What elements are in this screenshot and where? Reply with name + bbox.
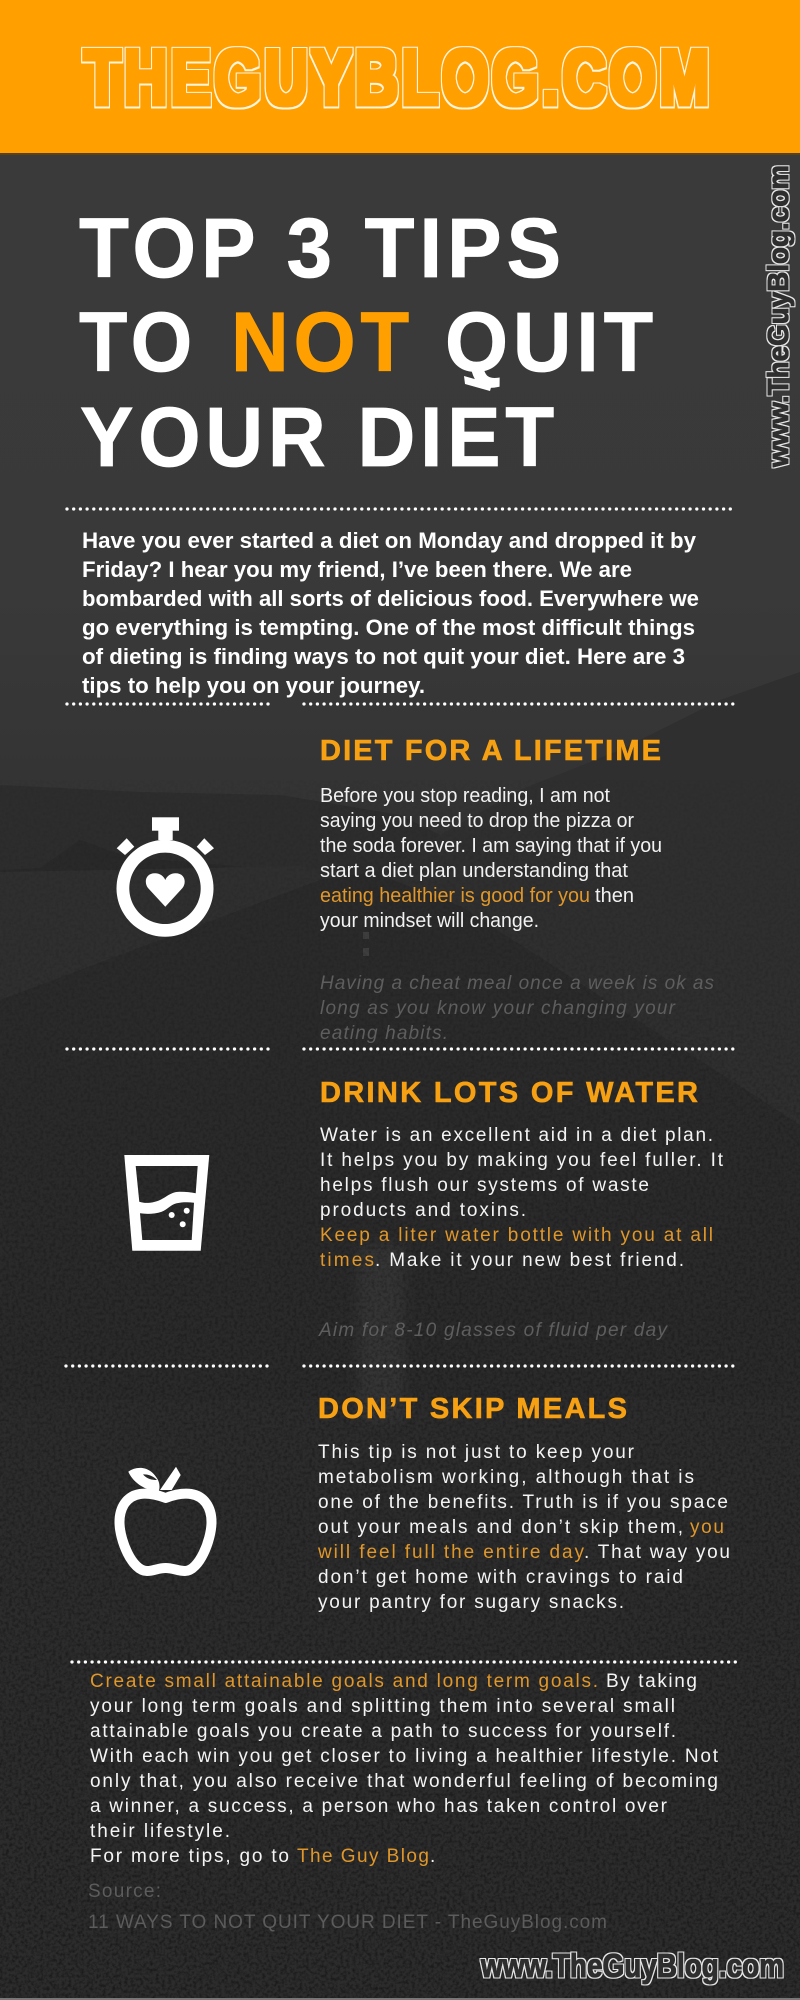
title [79, 201, 658, 484]
title: QUIT [445, 295, 658, 389]
body text: eating healthier is good for you [320, 885, 590, 907]
title: TO [79, 295, 197, 389]
body text: out your meals and don’t skip them, [318, 1517, 683, 1538]
divider closing [72, 1660, 738, 1664]
divider section 1 [67, 702, 733, 706]
closing text: your long term goals and splitting them into several small [90, 1696, 675, 1717]
body text: . Make it your new best friend. [375, 1250, 684, 1271]
body text: . That way you [584, 1542, 730, 1563]
italic note: long as you know your changing your [320, 998, 676, 1019]
vertical watermark: www.TheGuyBlog.com [763, 165, 795, 468]
body text: helps flush our systems of waste [320, 1175, 649, 1196]
closing text [90, 1671, 719, 1867]
icon: apple [120, 1467, 212, 1571]
body text: one of the benefits. Truth is if you space [318, 1492, 728, 1513]
body text: your pantry for sugary snacks. [318, 1592, 624, 1613]
body text: will feel full the entire day [317, 1542, 584, 1563]
body text [317, 1442, 730, 1613]
italic note [320, 973, 714, 1044]
italic note: eating habits. [320, 1023, 448, 1044]
body text: It helps you by making you feel fuller. It [320, 1150, 724, 1171]
body text: Water is an excellent aid in a diet plan. [320, 1125, 713, 1146]
body text: your mindset will change. [320, 910, 539, 932]
closing text: By taking [606, 1671, 697, 1692]
closing text: . [430, 1846, 435, 1867]
body text: Keep a liter water bottle with you at all [320, 1225, 713, 1246]
source: 11 WAYS TO NOT QUIT YOUR DIET - TheGuyBlog.com [88, 1912, 607, 1933]
closing text: For more tips, go to [90, 1846, 289, 1867]
intro text: bombarded with all sorts of delicious food. Everywhere we [82, 586, 699, 611]
closing text: attainable goals you create a path to success for yourself. [90, 1721, 676, 1742]
body text: don’t get home with cravings to raid [318, 1567, 683, 1588]
body text: start a diet plan understanding that [320, 860, 628, 882]
closing text: Create small attainable goals and long term goals. [90, 1671, 598, 1692]
body text: products and toxins. [320, 1200, 526, 1221]
panel: don't skip meals [120, 1393, 730, 1613]
title: NOT [231, 295, 414, 389]
icon: stopwatch with heart [117, 817, 214, 937]
body text: times [320, 1250, 374, 1271]
body text: the soda forever. I am saying that if you [320, 835, 662, 857]
intro text: tips to help you on your journey. [82, 673, 425, 698]
closing text: only that, you also receive that wonderful feeling of becoming [90, 1771, 718, 1792]
heading: DRINK LOTS OF WATER [320, 1077, 698, 1109]
closing text: The Guy Blog [297, 1846, 429, 1867]
italic note: Having a cheat meal once a week is ok as [320, 973, 714, 994]
closing text: their lifestyle. [90, 1821, 230, 1842]
italic note: Aim for 8-10 glasses of fluid per day [318, 1320, 668, 1341]
header banner [0, 0, 800, 155]
intro text [82, 528, 699, 698]
body text: then [595, 885, 634, 907]
intro text: Have you ever started a diet on Monday and dropped it by [82, 528, 696, 553]
closing text: With each win you get closer to living a healthier lifestyle. Not [90, 1746, 719, 1767]
closing text: a winner, a success, a person who has taken control over [90, 1796, 668, 1817]
intro text: Friday? I hear you my friend, I’ve been there. We are [82, 557, 632, 582]
source: Source: [88, 1881, 161, 1902]
body text: Before you stop reading, I am not [320, 785, 610, 807]
title: TOP 3 TIPS [79, 201, 566, 295]
body text: metabolism working, although that is [318, 1467, 694, 1488]
body text: you [690, 1517, 724, 1538]
body text [320, 1125, 724, 1271]
divider section 3 [66, 1364, 733, 1368]
heading: DIET FOR A LIFETIME [320, 735, 661, 767]
icon: glass of water [124, 1155, 209, 1251]
body text: saying you need to drop the pizza or [320, 810, 634, 832]
intro text: go everything is tempting. One of the most difficult things [82, 615, 695, 640]
panel: diet for a lifetime [117, 735, 714, 1044]
source [88, 1881, 607, 1933]
body text: This tip is not just to keep your [318, 1442, 635, 1463]
divider top [67, 507, 731, 511]
title: YOUR DIET [80, 390, 559, 484]
panel: drink lots of water [124, 1077, 724, 1341]
heading: DON’T SKIP MEALS [318, 1393, 627, 1425]
intro text: of dieting is finding ways to not quit your diet. Here are 3 [82, 644, 685, 669]
divider section 2 [67, 1047, 733, 1051]
body text [320, 785, 662, 932]
